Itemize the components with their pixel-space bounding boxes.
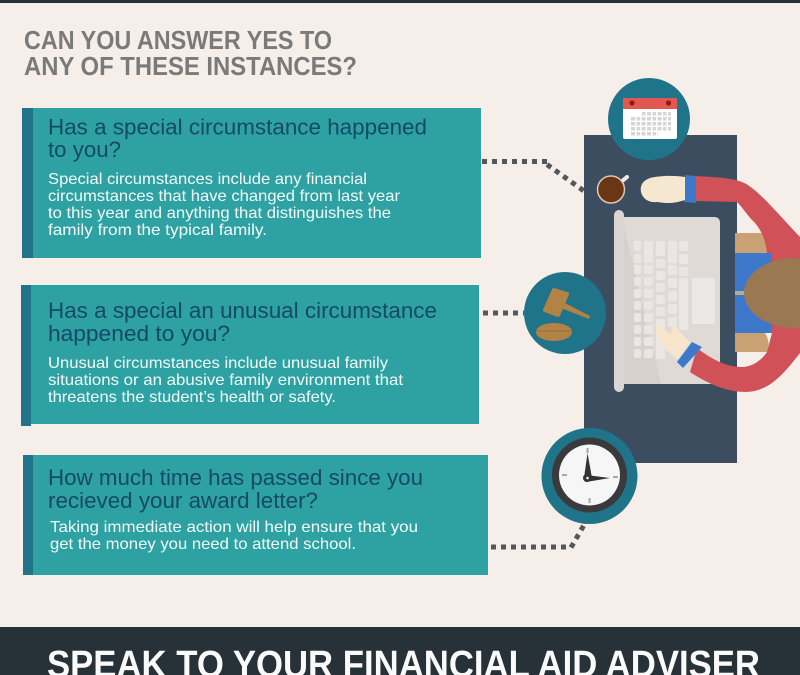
heading: unusual circumstance: happened to you? xyxy=(48,321,230,346)
hand: lower xyxy=(656,325,702,368)
heading: time since award letter xyxy=(48,465,423,513)
panel: time since award letter xyxy=(23,455,488,575)
text: special circumstance description: circumstances that have changed from last year xyxy=(48,188,401,205)
illustration: person at desk with laptop xyxy=(584,135,800,463)
heading: time since award letter: How much time has passed since you xyxy=(48,465,423,490)
connector: panel 3 to clock xyxy=(491,525,584,548)
text: time since award description: get the money you need to attend school. xyxy=(50,536,356,553)
keyboard xyxy=(634,241,688,359)
heading: special circumstance: Has a special circumstance happened xyxy=(48,114,427,140)
icon: clock xyxy=(542,428,638,524)
title: ANY OF THESE INSTANCES? xyxy=(24,51,357,81)
chair xyxy=(735,233,775,352)
text: time since award description xyxy=(50,519,418,553)
torso and arms xyxy=(690,176,800,392)
trackpad xyxy=(692,278,715,324)
panel: unusual circumstance xyxy=(21,285,479,426)
title xyxy=(24,25,357,81)
icon: calendar xyxy=(608,78,690,160)
footer banner xyxy=(0,627,800,675)
text: time since award description: Taking immediate action will help ensure that you xyxy=(50,519,418,536)
text: special circumstance description: to this year and anything that distinguishes the xyxy=(48,205,391,222)
heading: special circumstance xyxy=(48,114,427,162)
hand: upper xyxy=(641,175,696,203)
desk xyxy=(584,135,737,463)
connector: panel 1 to calendar xyxy=(482,162,584,191)
icon: gavel xyxy=(524,272,606,354)
heading: unusual circumstance: Has a special an unusual circumstance xyxy=(48,298,437,323)
heading: unusual circumstance xyxy=(48,298,437,346)
text: special circumstance description: family from the typical family. xyxy=(48,222,267,239)
text: unusual circumstance description: situations or an abusive family environment that xyxy=(48,372,404,389)
heading: time since award letter: recieved your award letter? xyxy=(48,488,318,513)
laptop xyxy=(614,210,720,392)
text: unusual circumstance description xyxy=(48,355,404,406)
head xyxy=(744,258,800,328)
title: CAN YOU ANSWER YES TO xyxy=(24,25,332,55)
text: unusual circumstance description: threatens the student’s health or safety. xyxy=(48,389,336,406)
panel: special circumstance xyxy=(22,108,481,258)
connector: panel 2 to gavel xyxy=(483,310,524,316)
heading: special circumstance: to you? xyxy=(48,137,121,162)
text: unusual circumstance description: Unusual circumstances include unusual family xyxy=(48,355,388,372)
text: special circumstance description: Special circumstances include any financial xyxy=(48,171,367,188)
text: special circumstance description xyxy=(48,171,401,239)
coffee cup xyxy=(598,176,627,203)
